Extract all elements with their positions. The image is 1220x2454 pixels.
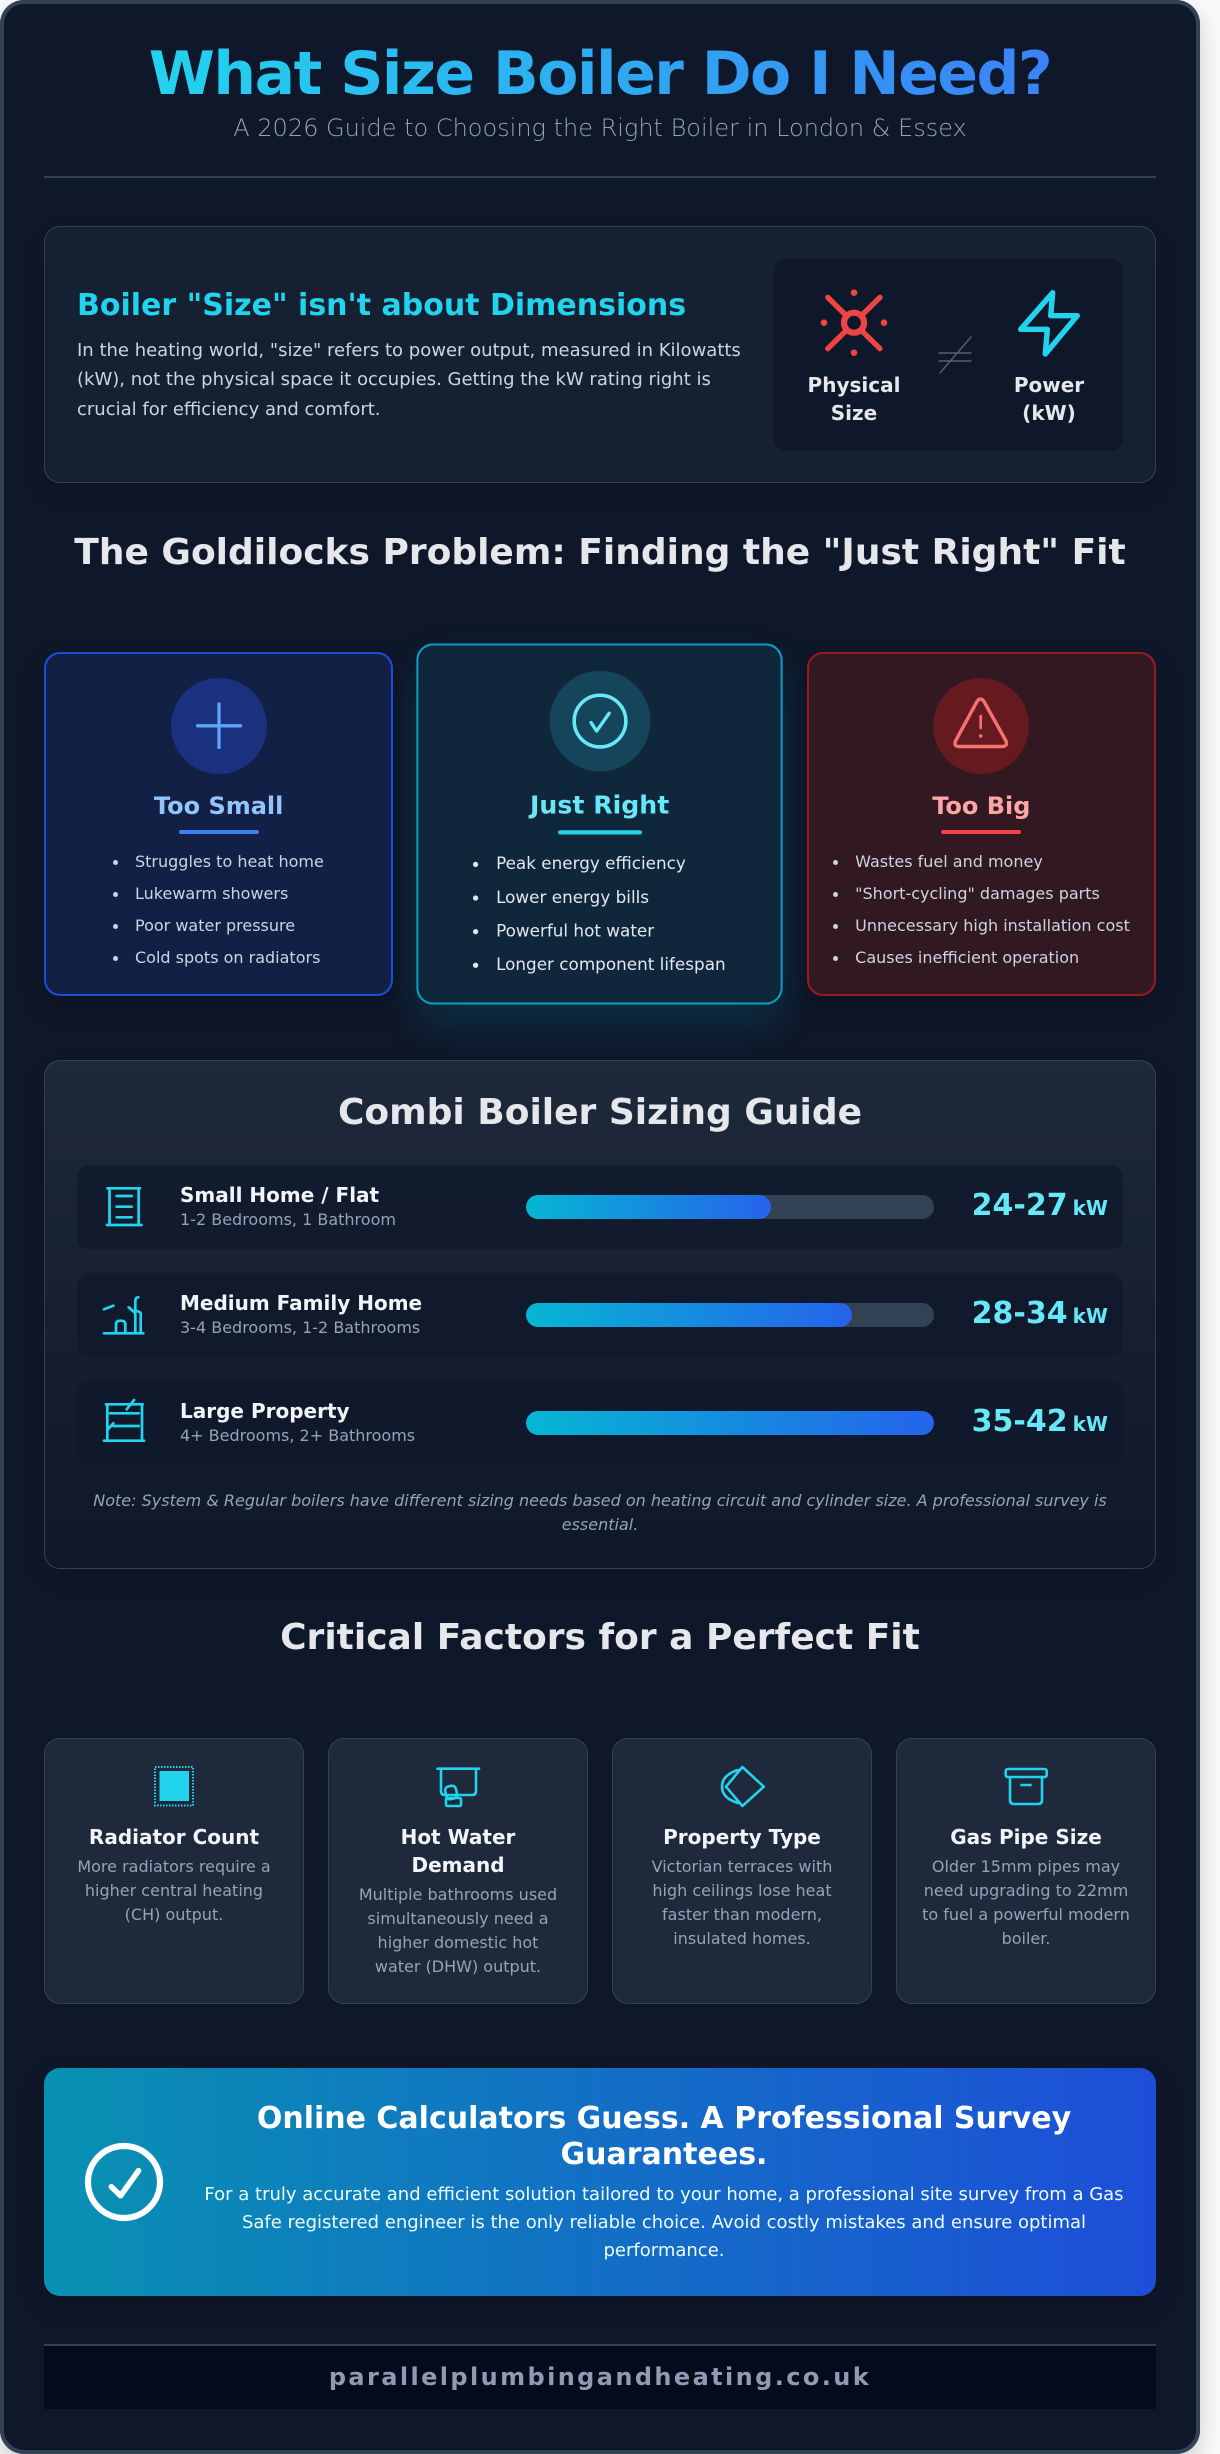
cta heading: Guarantees. bbox=[561, 2137, 767, 2172]
factor text: higher domestic hot bbox=[378, 1933, 538, 1952]
icon: pipe bbox=[1004, 1768, 1048, 1806]
panel: combi boiler sizing guide bbox=[44, 1060, 1156, 1569]
icon: check circle bbox=[550, 671, 650, 772]
title: What Size Boiler Do I Need? bbox=[149, 39, 1051, 109]
card list: Wastes fuel and money bbox=[855, 852, 1043, 871]
factor text: (CH) output. bbox=[125, 1905, 223, 1924]
note bbox=[93, 1491, 1107, 1534]
card list: Powerful hot water bbox=[496, 921, 654, 941]
factor text: Older 15mm pipes may bbox=[932, 1857, 1120, 1876]
card title: Too Small bbox=[154, 792, 283, 820]
panel: boiler size explanation bbox=[44, 226, 1156, 483]
icon: warning bbox=[933, 678, 1029, 774]
comparison box bbox=[774, 259, 1123, 451]
card: gas pipe size bbox=[896, 1738, 1156, 2004]
factor text bbox=[922, 1825, 1130, 1948]
website: parallelplumbingandheating.co.uk bbox=[329, 2363, 871, 2391]
factor text bbox=[359, 1825, 557, 1976]
row name: Medium Family Home bbox=[180, 1291, 422, 1315]
cta text: For a truly accurate and efficient solution tailored to your home, a professional site survey from a Gas bbox=[204, 2184, 1124, 2205]
card: radiator count bbox=[44, 1738, 304, 2004]
row: large property bbox=[77, 1381, 1123, 1465]
factor text: Multiple bathrooms used bbox=[359, 1885, 557, 1904]
bar: 80 percent bbox=[526, 1303, 934, 1327]
icon: radiator bbox=[154, 1766, 194, 1806]
bar: 60 percent bbox=[526, 1195, 934, 1219]
icon: not equal bbox=[938, 336, 972, 374]
panel text: crucial for efficiency and comfort. bbox=[77, 398, 381, 420]
factor text: Gas Pipe Size bbox=[950, 1825, 1102, 1849]
cta text bbox=[204, 2184, 1124, 2261]
card list: Lower energy bills bbox=[496, 887, 649, 907]
cta text: performance. bbox=[604, 2240, 724, 2261]
cta heading: Online Calculators Guess. A Professional Survey bbox=[257, 2101, 1071, 2136]
card list: Longer component lifespan bbox=[496, 954, 726, 974]
card list: "Short-cycling" damages parts bbox=[855, 884, 1100, 903]
label: physical size bbox=[808, 373, 900, 425]
icon: lightning bolt bbox=[1018, 290, 1080, 357]
heading: critical factors: Critical Factors for a Perfect Fit bbox=[280, 1617, 920, 1658]
factor text: water (DHW) output. bbox=[375, 1957, 541, 1976]
panel: just right bbox=[417, 643, 783, 1005]
card list: Peak energy efficiency bbox=[496, 853, 686, 873]
card list: Poor water pressure bbox=[135, 916, 295, 935]
value: 24-27kW bbox=[972, 1188, 1108, 1223]
factor text: More radiators require a bbox=[77, 1857, 271, 1876]
panel: too big bbox=[807, 652, 1156, 996]
factor text: faster than modern, bbox=[662, 1905, 822, 1924]
panel: too small bbox=[44, 652, 393, 996]
card list bbox=[113, 852, 324, 967]
factor text: high ceilings lose heat bbox=[652, 1881, 832, 1900]
icon: tap bbox=[436, 1767, 480, 1808]
icon: check circle bbox=[84, 2142, 164, 2222]
label: physical size: Size bbox=[831, 401, 877, 425]
heading: goldilocks: The Goldilocks Problem: Finding the "Just Right" Fit bbox=[74, 532, 1126, 573]
label: power bbox=[1014, 373, 1084, 425]
icon: diamond bbox=[720, 1766, 766, 1808]
card list: Unnecessary high installation cost bbox=[855, 916, 1130, 935]
factor text bbox=[652, 1825, 832, 1948]
factor text: to fuel a powerful modern bbox=[922, 1905, 1130, 1924]
row: medium home bbox=[77, 1273, 1123, 1357]
factor text: insulated homes. bbox=[673, 1929, 811, 1948]
label: power: (kW) bbox=[1022, 401, 1076, 425]
factor text: Property Type bbox=[663, 1825, 821, 1849]
note: Note: System & Regular boilers have different sizing needs based on heating circuit and cylinder size. A professional survey is bbox=[93, 1491, 1107, 1510]
card list: Lukewarm showers bbox=[135, 884, 288, 903]
label: physical size: Physical bbox=[808, 373, 900, 397]
factor text: Hot Water bbox=[401, 1825, 515, 1849]
bar: 100 percent bbox=[526, 1411, 934, 1435]
factor text: need upgrading to 22mm bbox=[924, 1881, 1128, 1900]
panel text: In the heating world, "size" refers to power output, measured in Kilowatts bbox=[77, 340, 741, 361]
card list: Struggles to heat home bbox=[135, 852, 324, 871]
factor text: simultaneously need a bbox=[367, 1909, 549, 1928]
row description: 3-4 Bedrooms, 1-2 Bathrooms bbox=[180, 1318, 420, 1337]
row description: 1-2 Bedrooms, 1 Bathroom bbox=[180, 1210, 396, 1229]
card list bbox=[472, 853, 726, 974]
row name: Small Home / Flat bbox=[180, 1183, 379, 1207]
subtitle: A 2026 Guide to Choosing the Right Boiler in London & Essex bbox=[233, 114, 967, 142]
row description: 4+ Bedrooms, 2+ Bathrooms bbox=[180, 1426, 415, 1445]
row: small home bbox=[77, 1165, 1123, 1249]
label: power: Power bbox=[1014, 373, 1084, 397]
card: hot water demand bbox=[328, 1738, 588, 2004]
icon: flat bbox=[106, 1187, 143, 1226]
factor text: Demand bbox=[411, 1853, 505, 1877]
panel heading: Boiler "Size" isn't about Dimensions bbox=[77, 288, 686, 323]
card: property type bbox=[612, 1738, 872, 2004]
card title: Too Big bbox=[932, 792, 1030, 820]
value: 28-34kW bbox=[972, 1296, 1108, 1331]
factor text: Radiator Count bbox=[89, 1825, 259, 1849]
card list: Causes inefficient operation bbox=[855, 948, 1079, 967]
icon: plus bbox=[171, 678, 267, 774]
cta text: Safe registered engineer is the only reliable choice. Avoid costly mistakes and ensure optimal bbox=[242, 2212, 1086, 2233]
card title: Just Right bbox=[530, 790, 670, 820]
card list: Cold spots on radiators bbox=[135, 948, 320, 967]
factor text: Victorian terraces with bbox=[652, 1857, 832, 1876]
footer bbox=[44, 2344, 1156, 2409]
icon: house bbox=[102, 1296, 145, 1335]
factor text bbox=[77, 1825, 271, 1924]
panel text bbox=[77, 340, 741, 420]
value: 35-42kW bbox=[972, 1404, 1108, 1439]
panel: call to action bbox=[44, 2068, 1156, 2296]
factor text: higher central heating bbox=[85, 1881, 263, 1900]
icon: physical size bbox=[820, 289, 888, 356]
card list bbox=[833, 852, 1130, 967]
cta heading bbox=[257, 2101, 1071, 2172]
row name: Large Property bbox=[180, 1399, 350, 1423]
factor text: boiler. bbox=[1002, 1929, 1050, 1948]
icon: large house bbox=[102, 1398, 146, 1442]
panel text: (kW), not the physical space it occupies. Getting the kW rating right is bbox=[77, 369, 711, 390]
section heading: Combi Boiler Sizing Guide bbox=[338, 1092, 862, 1133]
note: essential. bbox=[562, 1515, 638, 1534]
